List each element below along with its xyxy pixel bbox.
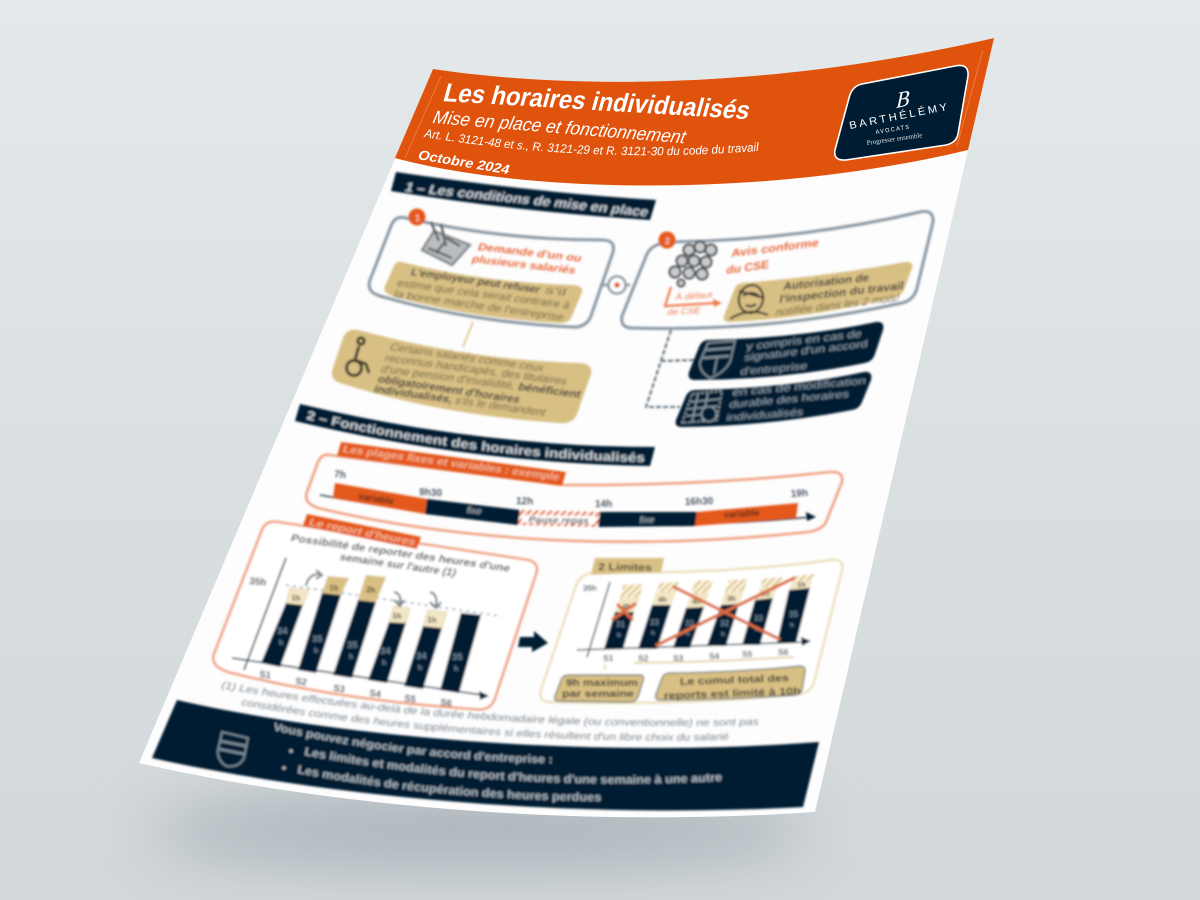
topper labels: 1h bbox=[329, 583, 339, 593]
tag: plages bbox=[337, 442, 566, 486]
bullet list bbox=[280, 745, 724, 805]
subtitle: Mise en place et fonctionnement bbox=[431, 106, 689, 147]
reported hour labels bbox=[622, 580, 806, 611]
bullet list: Les modalités de récupération des heures perdues bbox=[296, 763, 603, 805]
week labels: S5 bbox=[742, 649, 753, 659]
text: autorisation: Autorisation de bbox=[783, 272, 870, 293]
report arrows bbox=[306, 570, 441, 608]
bar values bbox=[277, 626, 463, 673]
badge 1: 1 bbox=[415, 213, 420, 223]
dashed connectors bbox=[646, 330, 696, 407]
panel: avis CSE bbox=[622, 211, 933, 328]
panel: modification durable: durable des horaires bbox=[729, 389, 850, 411]
panel: limites bbox=[540, 558, 842, 703]
title: Les horaires individualisés bbox=[440, 78, 754, 125]
text: possibilité: Possibilité de reporter des heures d'une bbox=[289, 532, 512, 575]
axes bbox=[577, 582, 805, 657]
topper labels: 1h bbox=[392, 611, 402, 621]
badge 2: 2 bbox=[665, 236, 670, 246]
logo card: Progresser ensemble bbox=[866, 131, 923, 147]
chart: limites bbox=[577, 574, 815, 670]
bullet list: Les limites et modalités du report d'heures d'une semaine à une autre bbox=[302, 745, 724, 786]
bar values: h bbox=[382, 660, 386, 667]
hatched headroom bbox=[620, 574, 815, 598]
topper labels: 1h bbox=[427, 615, 437, 625]
week labels bbox=[603, 647, 789, 663]
bar values: 33 bbox=[754, 614, 763, 623]
bars bbox=[261, 593, 481, 693]
panel: plages fixes et variables bbox=[306, 442, 842, 542]
topper labels: 2h bbox=[366, 585, 376, 595]
week labels: S2 bbox=[638, 653, 649, 663]
bar values: 35 bbox=[452, 652, 463, 663]
icon: group of people bbox=[670, 242, 716, 286]
bar values: h bbox=[314, 648, 318, 655]
panel: salariés handicapés: d'une pension d'invalidité, bénéficient bbox=[379, 363, 583, 401]
panel: limites: 2 Limites bbox=[598, 562, 653, 574]
poster drop shadow bbox=[140, 796, 820, 864]
panel: accord d'entreprise bbox=[689, 322, 883, 380]
text: demande: Demande d'un ou bbox=[476, 241, 584, 265]
text: salariés handicapés: Certains salariés comme ceux bbox=[388, 342, 546, 374]
week labels: S6 bbox=[778, 647, 789, 657]
time ticks bbox=[334, 469, 808, 510]
panel: demande salariés: plusieurs salariés bbox=[470, 253, 578, 277]
panel: avis CSE: du CSE bbox=[726, 259, 770, 277]
limit 1 label: 9h maximum bbox=[566, 678, 638, 689]
tan note: employeur bbox=[384, 262, 582, 323]
tag: limites bbox=[591, 558, 664, 575]
timeline labels: variable bbox=[358, 491, 395, 508]
footnote: (1) Les heures effectuées au-delà de la durée hebdomadaire légale (ou conventionnelle) ne sont pas bbox=[220, 680, 760, 729]
panel: modification durable: individualisés bbox=[725, 407, 804, 424]
bar values: h bbox=[721, 631, 725, 638]
limit 2 label bbox=[656, 666, 805, 702]
bar values: 32 bbox=[720, 619, 729, 628]
timeline labels: fixe bbox=[638, 515, 655, 526]
poster sheet bbox=[139, 38, 994, 817]
timeline arrow bbox=[320, 495, 812, 525]
text: employeur: L'employeur peut refuser bbox=[409, 267, 542, 296]
icon: calendar and clock bbox=[682, 391, 722, 423]
time ticks: 12h bbox=[516, 496, 533, 507]
timeline labels: fixe bbox=[465, 505, 483, 517]
week labels: S1 bbox=[603, 653, 614, 663]
panel: accord d'entreprise: d'entreprise bbox=[740, 361, 808, 378]
timeline: fixe morning bbox=[425, 499, 520, 525]
timeline: variable evening bbox=[695, 503, 798, 526]
week labels: S4 bbox=[369, 688, 382, 700]
reported hour labels: 2h bbox=[761, 589, 770, 598]
bar values: h bbox=[651, 630, 655, 637]
bar values: 34 bbox=[380, 646, 391, 657]
reported hour labels: 3h bbox=[727, 594, 736, 603]
icon: shield bbox=[700, 341, 735, 378]
bar values: h bbox=[617, 632, 621, 639]
bar values: 33 bbox=[650, 618, 659, 627]
reported hour labels: 1h bbox=[797, 580, 806, 589]
text: accord: y compris en cas de bbox=[746, 329, 863, 353]
week labels: S5 bbox=[404, 693, 417, 705]
timeline labels: variable bbox=[723, 508, 760, 521]
bar values: 35 bbox=[789, 610, 798, 619]
reported hour labels: 4h bbox=[622, 602, 631, 611]
bar values: 35 bbox=[312, 634, 323, 645]
icon: wheelchair bbox=[346, 338, 369, 376]
chart: report d'heures: 35h bbox=[249, 576, 267, 589]
panel: salariés handicapés: reconnus handicapés, des titulaires bbox=[383, 353, 569, 388]
panel: report d'heures: semaine sur l'autre (1) bbox=[338, 551, 458, 579]
heading: section 1 bbox=[391, 172, 656, 220]
bar values: h bbox=[755, 626, 759, 633]
time ticks: 19h bbox=[790, 488, 808, 500]
crosses bbox=[613, 578, 794, 645]
panel: demande salariés: estime que cela serait contraire à bbox=[395, 278, 572, 312]
week labels bbox=[259, 669, 453, 709]
badge 2 bbox=[658, 232, 676, 248]
header band bbox=[395, 38, 994, 186]
panel: modification durable bbox=[676, 372, 871, 427]
panel: accord d'entreprise: signature d'un accord bbox=[744, 339, 868, 364]
week labels: S1 bbox=[259, 669, 272, 681]
arrow: towards limits bbox=[518, 631, 548, 652]
time ticks: 14h bbox=[595, 499, 612, 510]
bar values: h bbox=[279, 640, 283, 647]
bar values: 32 bbox=[685, 619, 694, 628]
bar values: 34 bbox=[416, 651, 427, 662]
week labels: S6 bbox=[440, 697, 453, 709]
text: avis conforme: Avis conforme bbox=[731, 237, 819, 260]
dashed 35h line bbox=[286, 585, 501, 616]
time ticks: 7h bbox=[334, 469, 346, 481]
panel: report d'heures bbox=[213, 514, 537, 709]
topper labels bbox=[291, 583, 437, 625]
bars bbox=[604, 588, 810, 649]
arrow: à défaut de CSE: À défaut bbox=[675, 289, 714, 302]
chart: limites: 35h bbox=[583, 584, 597, 593]
bar values: 35 bbox=[347, 640, 358, 651]
panel: demande salariés: la bonne marche de l'entreprise bbox=[392, 289, 566, 324]
panel: salariés handicapés: obligatoirement d'horaires bbox=[376, 374, 522, 406]
logo card: BARTHÉLÉMY bbox=[848, 100, 951, 132]
panel: demande salariés bbox=[369, 208, 614, 327]
reported hour labels: 4h bbox=[658, 595, 667, 604]
text: modification: en cas de modification bbox=[732, 376, 867, 399]
reported hour labels: 4h bbox=[692, 597, 701, 606]
panel: salariés handicapés bbox=[332, 330, 591, 423]
tan connector line bbox=[463, 322, 473, 347]
chart: report d'heures bbox=[232, 558, 501, 709]
icon: shield bbox=[218, 732, 248, 766]
heading: section 1: 1 – Les conditions de mise en place bbox=[403, 180, 651, 219]
text: négocier: Vous pouvez négocier par accord d'entreprise : bbox=[272, 720, 554, 766]
heading: section 2: 2 – Fonctionnement des horaires individualisés bbox=[304, 409, 646, 464]
panel: demande salariés: s'il bbox=[543, 285, 568, 299]
week labels: S4 bbox=[709, 651, 720, 661]
timeline: fixe afternoon bbox=[598, 512, 697, 527]
bar values: h bbox=[790, 622, 794, 629]
timeline labels: Pause repas bbox=[528, 515, 590, 526]
limit 1 label: par semaine bbox=[562, 689, 635, 700]
logo card bbox=[835, 65, 968, 160]
bar values: 31 bbox=[616, 620, 625, 629]
limit 1 label bbox=[554, 675, 644, 702]
badge 1 bbox=[408, 208, 426, 226]
footnote: considérées comme des heures supplémentaires si elles résultent d'un libre choix du salarié bbox=[240, 699, 730, 742]
legal references: Art. L. 3121-48 et s., R. 3121-29 et R. 3121-30 du code du travail bbox=[423, 130, 759, 156]
tag: report bbox=[303, 514, 421, 549]
logo card: B bbox=[896, 85, 911, 113]
bar values: h bbox=[418, 665, 422, 672]
tan note: inspection bbox=[724, 262, 912, 322]
timeline: pause repas bbox=[518, 510, 600, 527]
bar values bbox=[616, 610, 798, 639]
bar values: h bbox=[349, 654, 353, 661]
timeline labels bbox=[358, 491, 760, 526]
week labels: S3 bbox=[673, 653, 684, 663]
time ticks: 9h30 bbox=[419, 487, 443, 499]
limit 2 label: reports est limité à 10h bbox=[664, 686, 801, 702]
limit 2 label: Le cumul total des bbox=[680, 673, 790, 688]
panel: accord d'entreprise footer bbox=[150, 698, 820, 812]
connector: plus bbox=[600, 276, 630, 294]
week labels: S2 bbox=[295, 676, 308, 688]
panel: plages fixes et variables: Les plages fixes et variables : exemple bbox=[341, 444, 562, 483]
week labels: S3 bbox=[333, 683, 346, 695]
panel: avis CSE: l'inspection du travail bbox=[779, 280, 904, 306]
toppers bbox=[286, 588, 447, 628]
topper labels: 1h bbox=[291, 593, 301, 603]
time ticks: 16h30 bbox=[685, 496, 714, 508]
panel: report d'heures: Le report d'heures bbox=[307, 517, 418, 548]
axes bbox=[232, 558, 482, 695]
arrow: à défaut de CSE: de CSE bbox=[667, 305, 702, 317]
icon: hand stamp bbox=[422, 222, 470, 265]
icon: inspector face bbox=[730, 282, 768, 319]
timeline: variable morning bbox=[333, 483, 427, 514]
bar values: h bbox=[686, 631, 690, 638]
logo card: AVOCATS bbox=[875, 125, 911, 136]
arrow: à défaut de CSE bbox=[665, 287, 722, 317]
brace and pointer bbox=[605, 657, 794, 670]
bar values: h bbox=[454, 666, 458, 673]
panel: salariés handicapés: individualisés, s'ils le demandent bbox=[372, 384, 548, 419]
reported hours bbox=[615, 580, 812, 612]
orange banner bbox=[395, 38, 994, 186]
date: Octobre 2024 bbox=[416, 148, 513, 177]
bar values: 34 bbox=[277, 626, 288, 637]
panel: avis CSE: notifiée dans les 2 mois! bbox=[775, 293, 900, 319]
poster body bbox=[150, 170, 936, 812]
